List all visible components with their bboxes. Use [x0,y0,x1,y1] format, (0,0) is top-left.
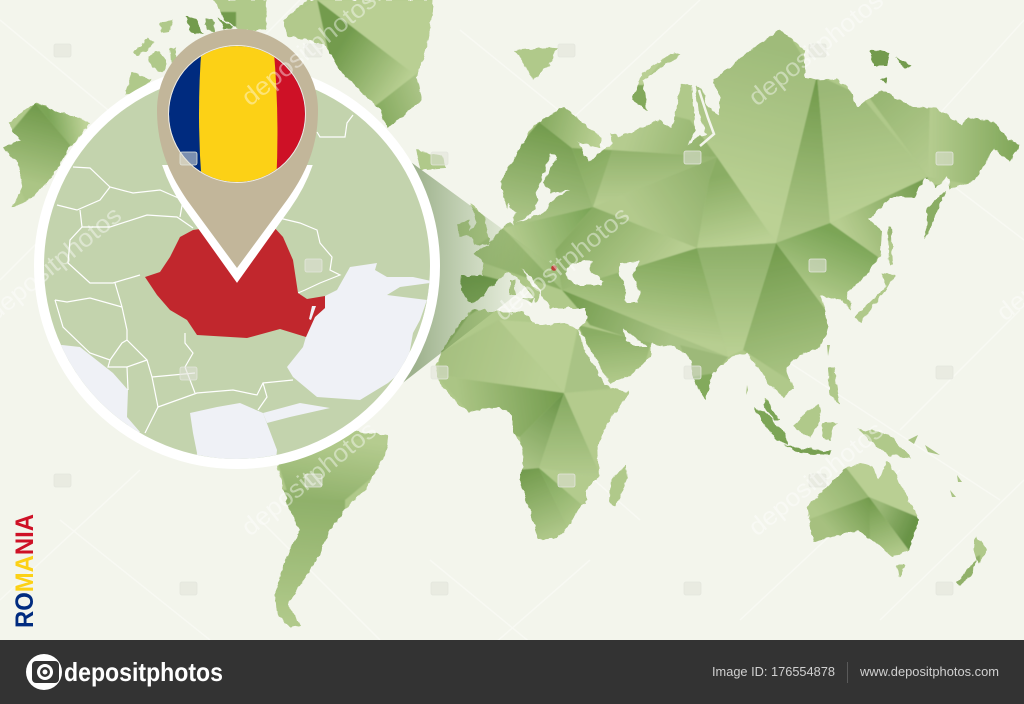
website: www.depositphotos.com [859,664,999,679]
watermark text: depositphotos [489,201,635,327]
location pin with flag [157,29,318,276]
flag of Romania [169,46,305,182]
seas in magnifier [61,263,430,459]
country borders [55,115,353,433]
inland seas and lakes [506,153,647,385]
pin white outline [162,165,313,283]
watermark camera icons [54,44,953,595]
small islands [522,298,962,497]
footer bar [0,640,1024,704]
watermark text [0,0,1024,542]
footer brand name: depositphotos [64,657,223,687]
Romania marker on world map [551,265,557,271]
image id: Image ID: 176554878 [712,664,835,679]
watermark text: depositphotos [743,416,889,542]
circle ring and land [39,68,435,464]
Romania highlighted [145,225,325,338]
pin body [157,29,318,268]
Ob gulf [699,90,714,146]
watermark text: depositphotos [236,416,382,542]
magnified map circle [39,68,440,470]
country title: ROMANIA [11,514,39,628]
projection beam from Romania to the magnifier [400,160,553,385]
footer logo icon [26,654,62,690]
